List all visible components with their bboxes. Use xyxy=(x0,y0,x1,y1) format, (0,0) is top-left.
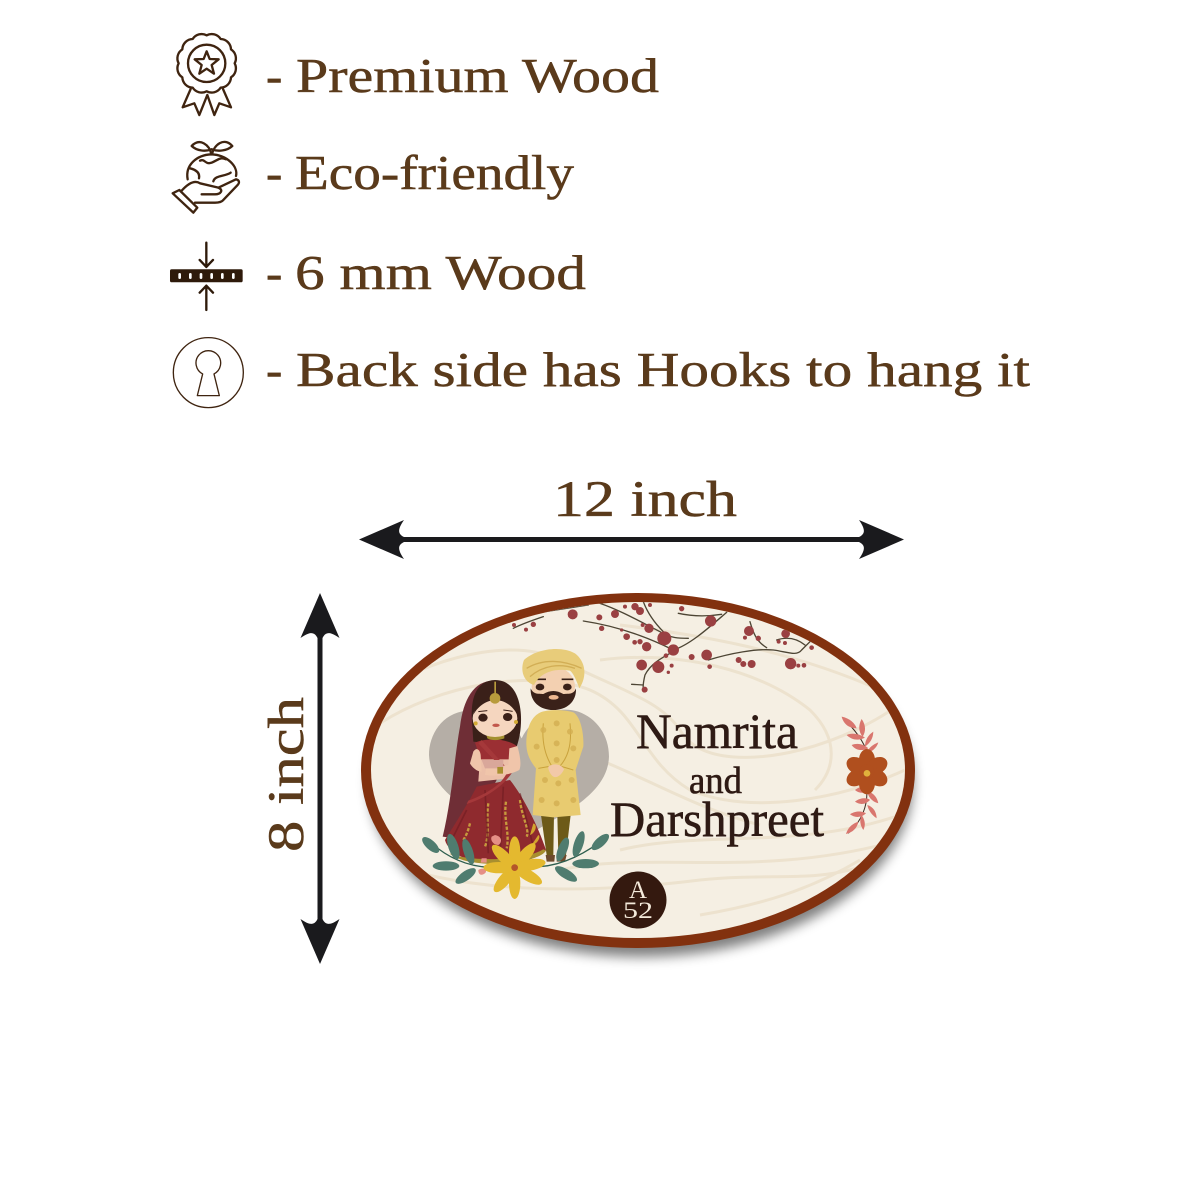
plate wood face xyxy=(371,602,905,938)
name: Namrita: Namrita xyxy=(636,703,798,759)
label: 12 inch: 12 inch xyxy=(553,472,737,528)
bride xyxy=(443,680,546,864)
feature: eco-friendly xyxy=(173,142,575,213)
panel: name plate xyxy=(361,593,915,957)
label: premium wood: - xyxy=(266,48,282,103)
bride sash xyxy=(467,740,512,804)
groom beard xyxy=(531,688,576,710)
icon: 6 mm thickness xyxy=(170,243,243,310)
bride waist xyxy=(478,758,510,782)
bride lehenga xyxy=(445,780,546,864)
foliage and yellow flower xyxy=(420,823,612,899)
house number badge xyxy=(610,872,666,928)
infographic canvas xyxy=(170,32,1030,966)
groom xyxy=(522,649,584,862)
house number badge: A xyxy=(629,877,647,904)
feature: premium wood xyxy=(177,34,659,115)
groom kurta xyxy=(526,710,583,817)
name text xyxy=(610,703,824,847)
word: and: and xyxy=(689,760,742,802)
grey heart xyxy=(429,710,609,840)
name: Darshpreet: Darshpreet xyxy=(610,791,824,847)
bride veil xyxy=(443,681,497,840)
wood grain xyxy=(370,625,905,915)
label: eco-friendly: - xyxy=(266,145,282,200)
groom turban xyxy=(522,649,584,688)
icon: medal with star xyxy=(177,34,236,115)
illustration: side flower sprig xyxy=(842,717,891,834)
dimension: width xyxy=(359,472,904,559)
panel: feature list xyxy=(170,34,1030,408)
groom face xyxy=(532,667,575,707)
plate shadow xyxy=(369,609,913,957)
groom hands xyxy=(548,764,564,777)
feature: thickness xyxy=(170,243,586,310)
illustration: couple xyxy=(420,649,612,899)
label: eco-friendly: Eco-friendly xyxy=(295,145,575,200)
bride necklace xyxy=(486,733,504,740)
label: back side hooks: - xyxy=(266,342,282,397)
bride arms xyxy=(485,746,520,776)
label: 6 mm wood: - xyxy=(266,245,282,300)
dimension: height xyxy=(259,593,340,964)
arrow: vertical xyxy=(300,593,340,964)
bride blouse xyxy=(475,739,517,759)
feature: hooks xyxy=(173,338,1030,408)
label: premium wood: Premium Wood xyxy=(296,48,659,103)
icon: hand holding globe xyxy=(173,142,239,213)
illustration: blossom branches xyxy=(512,602,814,693)
arrow: horizontal xyxy=(359,520,904,559)
bride face xyxy=(473,700,517,737)
groom legs xyxy=(541,815,571,855)
bride hair xyxy=(472,680,521,747)
icon: keyhole xyxy=(173,338,243,408)
label: 8 inch: 8 inch xyxy=(259,697,315,852)
plate border xyxy=(361,593,915,948)
house number badge: 52 xyxy=(623,898,653,923)
label: back side hooks: Back side has Hooks to hang it xyxy=(296,342,1030,397)
blossom branch group xyxy=(512,602,814,693)
label: 6 mm wood: 6 mm Wood xyxy=(295,245,586,300)
